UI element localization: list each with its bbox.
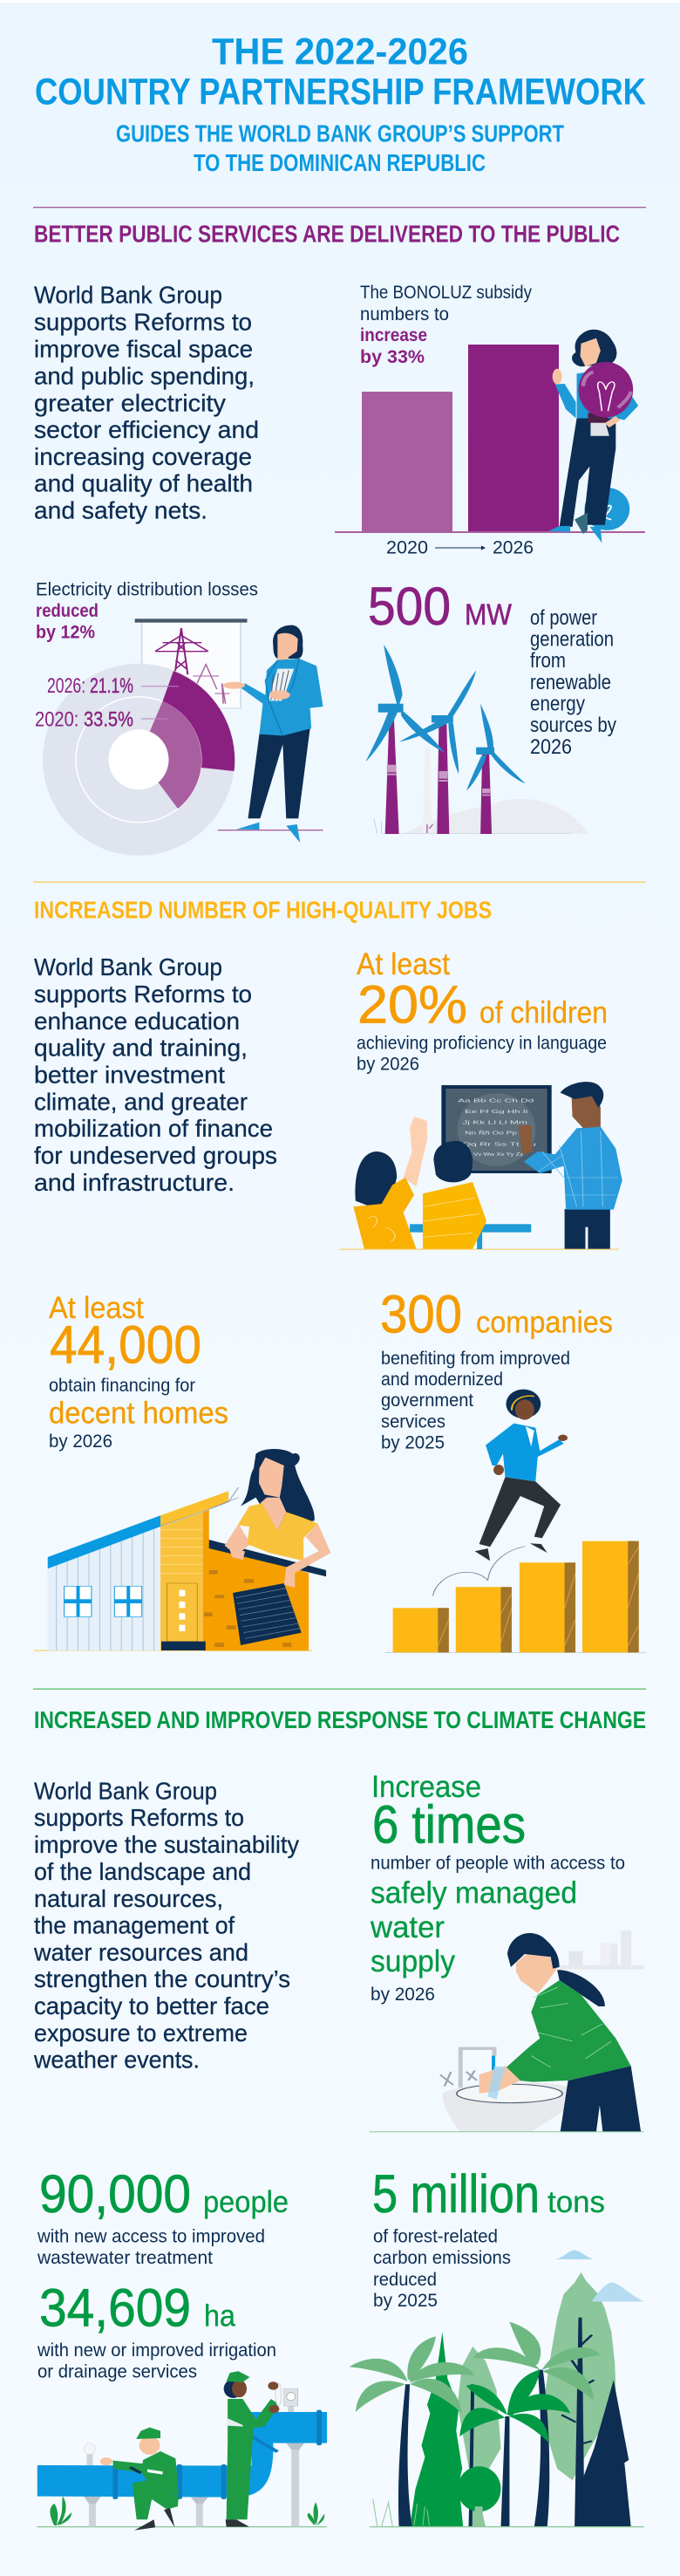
text: renewable energy: generation <box>530 628 614 652</box>
body text: climate reforms: strengthen the country’s <box>34 1965 290 1992</box>
stat: 6 times safely managed water: number of people with access to <box>371 1854 625 1874</box>
section heading: jobs: INCREASED NUMBER OF HIGH-QUALITY JOBS <box>34 897 492 924</box>
icon: wind turbines <box>365 645 589 834</box>
panel: better public services <box>34 220 645 856</box>
title block: GUIDES THE WORLD BANK GROUP’S SUPPORT <box>116 120 564 147</box>
stat: 20% of children: by 2026 <box>357 1055 419 1075</box>
icon: classroom with teacher and children <box>339 1082 622 1250</box>
text: renewable energy: renewable <box>530 671 611 694</box>
title block <box>35 31 646 176</box>
stat: 6 times safely managed water: by 2026 <box>371 1985 435 2005</box>
stat: 20% of children: of children <box>479 996 608 1030</box>
body text: climate reforms: water resources and <box>33 1939 248 1966</box>
callout: electricity distribution losses: reduced <box>36 601 99 621</box>
icon: classroom with teacher and children: Vv Ww Xx Yy Zz <box>473 1151 524 1158</box>
stat: 5 million tons: tons <box>547 2185 605 2219</box>
bar chart: BONOLUZ 2020 to 2026 <box>335 345 645 558</box>
icon: woman washing hands <box>370 1930 644 2132</box>
body text: jobs reforms: World Bank Group <box>34 953 222 981</box>
callout: electricity distribution losses <box>36 580 258 643</box>
big number: 500 MW <box>368 577 512 636</box>
stat: 44,000 decent homes: 44,000 <box>50 1315 201 1375</box>
big number: 500 MW: MW <box>465 598 512 632</box>
stat: 34,609 ha: 34,609 <box>39 2279 191 2338</box>
body text: jobs reforms: enhance education <box>34 1008 240 1035</box>
stat: 44,000 decent homes: decent homes <box>49 1397 228 1431</box>
callout: BONOLUZ subsidy: increase <box>360 325 427 345</box>
stat: 90,000 people: wastewater treatment <box>37 2248 213 2268</box>
callout: BONOLUZ subsidy <box>360 283 532 367</box>
callout: electricity distribution losses: Electricity distribution losses <box>36 580 258 600</box>
body text: jobs reforms: quality and training, <box>34 1035 248 1062</box>
stat: 20% of children: achieving proficiency in language <box>357 1034 607 1054</box>
stat: 5 million tons: reduced <box>373 2270 437 2290</box>
stat: 20% of children: At least <box>357 947 450 981</box>
callout: BONOLUZ subsidy: numbers to <box>360 304 449 325</box>
body text: public services reforms <box>34 282 259 523</box>
stat: 90,000 people <box>37 2164 289 2268</box>
stat: 44,000 decent homes: by 2026 <box>49 1431 112 1452</box>
body text: public services reforms: sector efficiency and <box>34 416 259 443</box>
stat: 20% of children <box>357 947 608 1075</box>
icon: classroom with teacher and children: Ee Ff Gg Hh Ii <box>465 1108 528 1115</box>
stat: 5 million tons: carbon emissions <box>373 2248 511 2268</box>
text: renewable energy <box>530 606 616 759</box>
body text: public services reforms: increasing coverage <box>34 443 252 470</box>
stat: 300 companies: benefiting from improved <box>381 1349 570 1369</box>
stat: 44,000 decent homes <box>49 1291 228 1452</box>
body text: climate reforms: natural resources, <box>34 1885 223 1912</box>
body text: climate reforms: weather events. <box>33 2046 200 2074</box>
body text: public services reforms: and public spending, <box>34 362 255 389</box>
bar chart: BONOLUZ 2020 to 2026: 2020 <box>386 537 428 558</box>
callout: BONOLUZ subsidy: by 33% <box>360 347 425 367</box>
text: renewable energy: 2026 <box>530 735 572 759</box>
stat: 34,609 ha: or drainage services <box>37 2362 197 2382</box>
body text: jobs reforms: better investment <box>34 1062 225 1089</box>
body text: public services reforms: World Bank Group <box>34 282 222 309</box>
body text: jobs reforms: and infrastructure. <box>34 1169 235 1196</box>
icon: classroom with teacher and children: Jj Kk Ll Ll Mm <box>462 1119 527 1125</box>
stat: 90,000 people: 90,000 <box>39 2164 191 2224</box>
stat: 300 companies: by 2025 <box>381 1433 445 1453</box>
body text: climate reforms <box>33 1778 299 2074</box>
bar chart: BONOLUZ 2020 to 2026: 2026 <box>493 537 534 558</box>
panel: climate change response <box>33 1706 646 2531</box>
stat: 5 million tons: 5 million <box>372 2164 540 2224</box>
stat: 90,000 people: people <box>203 2185 289 2219</box>
body text: jobs reforms: for undeserved groups <box>34 1142 277 1169</box>
stat: 20% of children: 20% <box>357 975 467 1035</box>
body text: climate reforms: exposure to extreme <box>34 2019 248 2046</box>
text: renewable energy: from <box>530 649 566 673</box>
stat: 300 companies <box>380 1285 613 1453</box>
stat: 300 companies: government <box>381 1390 473 1411</box>
stat: 44,000 decent homes: obtain financing for <box>49 1376 195 1396</box>
body text: climate reforms: improve the sustainability <box>34 1831 299 1858</box>
icon: woman presenting <box>218 625 323 843</box>
body text: public services reforms: improve fiscal space <box>34 335 253 363</box>
body text: public services reforms: greater electricity <box>34 389 226 416</box>
callout: electricity distribution losses: by 12% <box>36 623 95 643</box>
body text: public services reforms: and quality of health <box>34 469 253 497</box>
icon: classroom with teacher and children: Qq Rr Ss Tt Uu <box>462 1141 536 1147</box>
stat: 5 million tons: by 2025 <box>373 2291 438 2311</box>
stat: 34,609 ha: with new or improved irrigation <box>37 2340 276 2361</box>
stat: 44,000 decent homes: At least <box>49 1291 144 1325</box>
icon: presentation board with pylon <box>135 618 248 708</box>
title block: TO THE DOMINICAN REPUBLIC <box>194 149 486 176</box>
body text: jobs reforms <box>34 953 277 1196</box>
stat: 34,609 ha <box>37 2279 276 2382</box>
body text: jobs reforms: supports Reforms to <box>34 981 252 1008</box>
stat: 6 times safely managed water: 6 times <box>372 1795 526 1855</box>
title block: THE 2022-2026 <box>212 31 468 73</box>
stat: 5 million tons: of forest-related <box>373 2227 498 2247</box>
stat: 6 times safely managed water: safely managed <box>371 1876 577 1910</box>
body text: climate reforms: World Bank Group <box>34 1778 217 1805</box>
icon: woman climbing rising bars <box>385 1390 646 1653</box>
stat: 300 companies: 300 <box>380 1285 462 1344</box>
donut chart: distribution losses: 2026: 21.1% <box>47 674 133 698</box>
stat: 300 companies: companies <box>476 1306 613 1340</box>
body text: climate reforms: of the landscape and <box>34 1858 251 1885</box>
stat: 6 times safely managed water: Increase <box>371 1770 481 1804</box>
body text: public services reforms: and safety nets. <box>34 497 207 523</box>
stat: 6 times safely managed water <box>370 1770 625 2005</box>
icon: forest with palms and clouds <box>349 2250 644 2527</box>
icon: classroom with teacher and children: Aa Bb Cc Ch Dd <box>458 1097 534 1104</box>
icon: workers at water pipeline <box>37 2371 327 2531</box>
stat: 34,609 ha: ha <box>204 2299 235 2333</box>
stat: 300 companies: services <box>381 1412 445 1432</box>
body text: climate reforms: capacity to better face <box>34 1992 269 2019</box>
body text: climate reforms: the management of <box>34 1912 235 1939</box>
stat: 300 companies: and modernized <box>381 1370 503 1390</box>
body text: jobs reforms: climate, and greater <box>34 1089 248 1116</box>
panel: high-quality jobs <box>34 897 646 1653</box>
callout: BONOLUZ subsidy: The BONOLUZ subsidy <box>360 283 532 303</box>
icon: woman holding light bulb <box>548 330 638 543</box>
icon: classroom with teacher and children: Nn Ññ Oo Pp <box>465 1130 517 1136</box>
stat: 5 million tons <box>372 2164 605 2311</box>
body text: climate reforms: supports Reforms to <box>34 1804 244 1831</box>
body text: public services reforms: supports Reforms to <box>34 309 252 336</box>
icon: house and woman <box>34 1449 331 1651</box>
stat: 6 times safely managed water: water <box>370 1910 445 1944</box>
text: renewable energy: energy <box>530 693 585 716</box>
donut chart: distribution losses: 2020: 33.5% <box>35 708 133 732</box>
text: renewable energy: sources by <box>530 714 616 737</box>
text: renewable energy: of power <box>530 606 597 630</box>
big number: 500 MW: 500 <box>368 577 451 636</box>
body text: jobs reforms: mobilization of finance <box>34 1115 273 1142</box>
donut chart: distribution losses <box>35 664 235 856</box>
stat: 6 times safely managed water: supply <box>371 1944 455 1978</box>
stat: 90,000 people: with new access to improved <box>37 2227 265 2247</box>
